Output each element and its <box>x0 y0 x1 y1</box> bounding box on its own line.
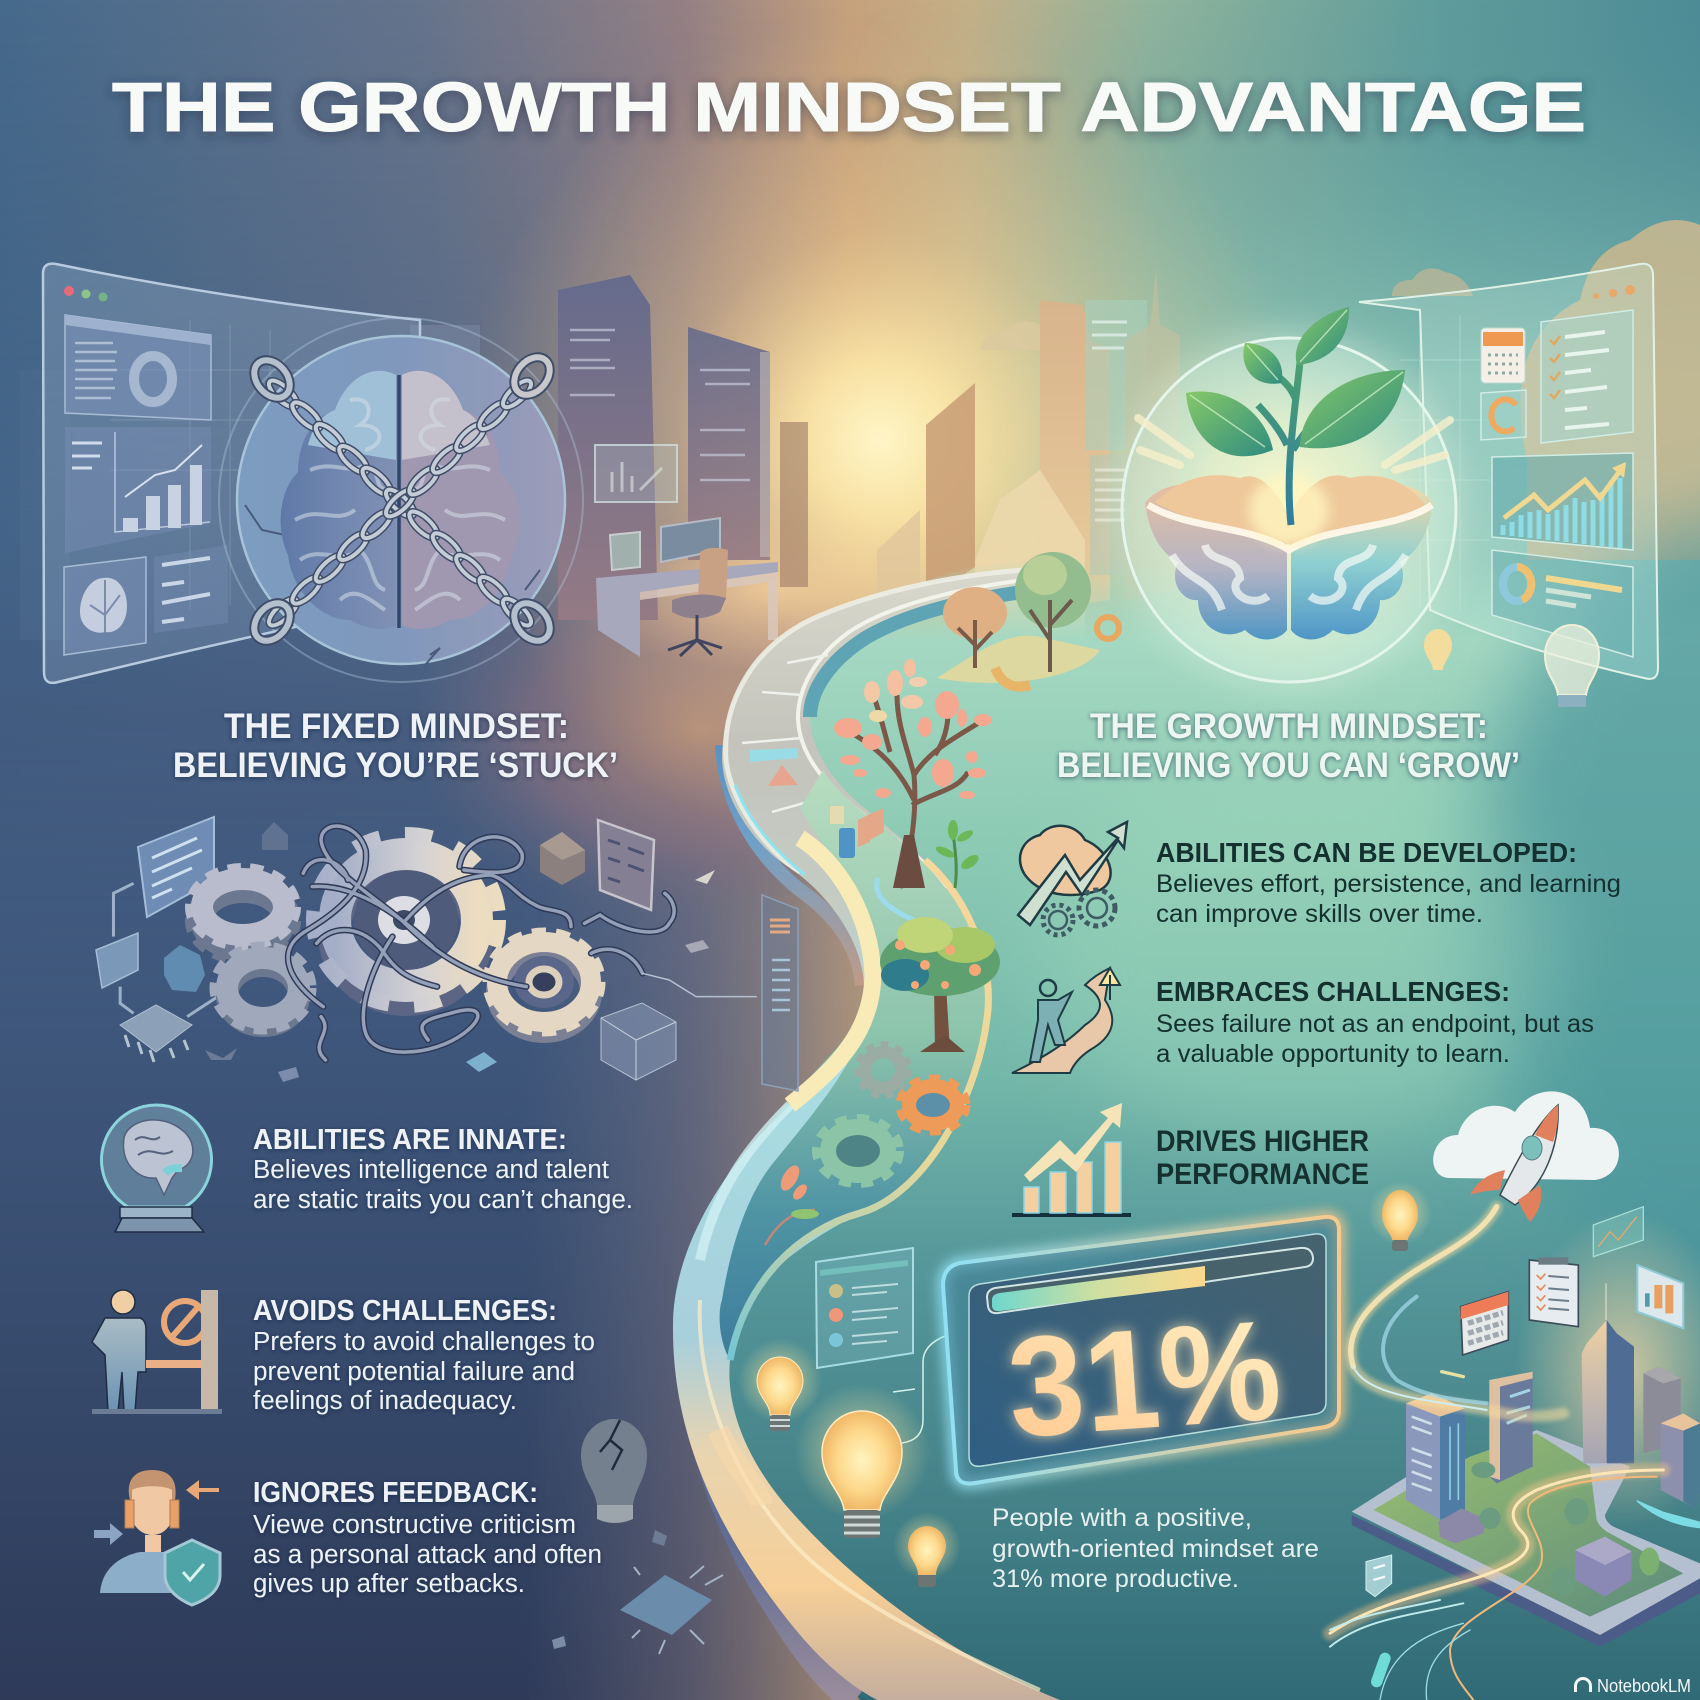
connector line <box>893 1336 945 1443</box>
tangled wires <box>288 826 756 1060</box>
left column text: abilities are innate: are static traits you can’t change. <box>253 1186 633 1214</box>
text card <box>154 545 228 633</box>
title: THE GROWTH MINDSET ADVANTAGE <box>112 68 1586 146</box>
left column text: abilities are innate <box>253 1124 633 1214</box>
panel: 31% stat <box>943 1217 1339 1483</box>
progress bar <box>987 1248 1313 1313</box>
left dashboard screen <box>43 264 420 683</box>
icon: blossom tree <box>834 659 992 888</box>
heading: fixed mindset: BELIEVING YOU’RE ‘STUCK’ <box>173 746 618 785</box>
line chart card <box>1492 453 1633 550</box>
sprout <box>1186 307 1405 525</box>
big number: 31% <box>1003 1290 1285 1468</box>
road surface rim and lines <box>726 570 1023 887</box>
small trees <box>1471 1462 1659 1596</box>
chart card <box>65 427 211 553</box>
icon: climber on winding path <box>1012 968 1120 1073</box>
icon: glowing bulbs <box>738 1339 961 1587</box>
sandy hill <box>937 636 1100 683</box>
heading: growth mindset <box>1057 707 1520 785</box>
small donut card <box>1481 390 1526 440</box>
right column text: abilities can be developed <box>1156 837 1621 928</box>
floating calendar <box>1461 1292 1508 1355</box>
glass road S-curve <box>673 570 1060 1700</box>
floating line chart card <box>1593 1207 1643 1257</box>
scattered debris <box>205 870 715 1082</box>
heading: growth mindset: BELIEVING YOU CAN ‘GROW’ <box>1057 746 1520 785</box>
icon: cloud and rocket <box>1433 1091 1619 1222</box>
brain card <box>64 557 146 655</box>
tree: green <box>1015 552 1091 672</box>
left column text: ignores feedback <box>253 1477 602 1598</box>
right skyline and clouds <box>877 220 1700 660</box>
chip <box>120 1005 192 1062</box>
productivity statement: People with a positive, <box>992 1504 1252 1532</box>
left column text: avoids challenges: AVOIDS CHALLENGES: <box>253 1295 557 1327</box>
right column text: abilities can be developed: Believes effort, persistence, and learning <box>1156 870 1621 898</box>
lower right isometric city <box>1352 1283 1700 1647</box>
left column text: ignores feedback: as a personal attack and often <box>253 1541 602 1569</box>
connector lines <box>113 883 223 1017</box>
icon: chip <box>552 1530 723 1654</box>
tree: tan <box>943 587 1007 668</box>
ground of the growth side <box>690 520 1700 1700</box>
illustration: broken gears and tangled wires <box>96 817 756 1082</box>
icon: person blocked by barrier <box>92 1290 222 1414</box>
heading: growth mindset: THE GROWTH MINDSET: <box>1090 707 1488 746</box>
floating server panel <box>762 895 798 1091</box>
cube <box>540 832 585 885</box>
small house glyph <box>262 822 288 850</box>
floating card right <box>598 820 654 910</box>
floating bar chart card <box>1637 1265 1683 1328</box>
brain <box>281 371 520 629</box>
list card <box>816 1248 913 1368</box>
right dashboard screen <box>1359 264 1658 679</box>
left column text: avoids challenges: feelings of inadequacy. <box>253 1387 517 1415</box>
heading: fixed mindset: THE FIXED MINDSET: <box>224 707 569 746</box>
icon: cracked lightbulb <box>581 1419 647 1523</box>
right gear <box>487 932 601 1032</box>
window with donut <box>65 315 211 420</box>
NotebookLM mark: NotebookLM <box>1597 1676 1691 1696</box>
right column text: embraces challenges: Sees failure not as an endpoint, but as <box>1156 1010 1594 1038</box>
left skyline and desk scene <box>20 275 808 657</box>
right column text: abilities can be developed: can improve skills over time. <box>1156 900 1483 928</box>
icon: fruit tree <box>880 917 1000 1052</box>
left small panel and boxes <box>96 933 205 992</box>
icon: chained brain in cracked globe <box>219 318 583 682</box>
platform <box>1352 1430 1700 1647</box>
icon: big bulb on screen <box>1545 625 1599 707</box>
left column text: avoids challenges <box>253 1295 595 1415</box>
left gears <box>191 869 311 1029</box>
floating clipboard <box>1529 1257 1578 1327</box>
icon: brain in crystal ball <box>101 1105 212 1232</box>
productivity statement: growth-oriented mindset are <box>992 1535 1319 1563</box>
box right <box>601 1003 676 1080</box>
brain bowl <box>1145 475 1433 639</box>
donut card <box>1492 550 1633 657</box>
right column text: drives higher performance <box>1156 1125 1369 1191</box>
left column text: avoids challenges: prevent potential failure and <box>253 1358 575 1386</box>
small bar chart on road <box>830 806 884 858</box>
icon: small bulb on screen <box>1424 629 1452 670</box>
right column text: abilities can be developed: ABILITIES CAN BE DEVELOPED: <box>1156 837 1577 868</box>
icon: small sprout <box>934 820 981 888</box>
center gear <box>314 835 498 1005</box>
rocket and city light streams <box>1330 1207 1663 1700</box>
heading: fixed mindset <box>173 707 618 785</box>
calendar card <box>1481 328 1525 383</box>
right column text: embraces challenges: EMBRACES CHALLENGES: <box>1156 976 1510 1007</box>
left column text: abilities are innate: ABILITIES ARE INNATE: <box>253 1124 567 1156</box>
light rays <box>1138 418 1450 470</box>
right column text: drives higher performance: DRIVES HIGHER <box>1156 1125 1369 1158</box>
chains <box>247 350 557 648</box>
left column text: abilities are innate: Believes intelligence and talent <box>253 1156 609 1184</box>
growth brain with sprout <box>1111 307 1467 695</box>
productivity statement: 31% more productive. <box>992 1565 1239 1593</box>
productivity statement <box>992 1504 1319 1593</box>
icon: rising bar chart <box>1012 1103 1131 1217</box>
checklist card <box>1541 310 1633 443</box>
right column text: embraces challenges: a valuable opportunity to learn. <box>1156 1040 1510 1068</box>
right column text: drives higher performance: PERFORMANCE <box>1156 1158 1369 1191</box>
floating note <box>1366 1555 1392 1597</box>
desk <box>596 518 778 657</box>
left column text: ignores feedback: Viewe constructive criticism <box>253 1511 576 1539</box>
icon: brain growth arrow and gears <box>1018 822 1127 935</box>
small flowers on road <box>765 1162 819 1245</box>
floating card <box>595 445 677 502</box>
floating card left <box>138 817 214 917</box>
left column text: ignores feedback: IGNORES FEEDBACK: <box>253 1477 538 1509</box>
icon: person with headphones and shield <box>94 1470 220 1605</box>
icon: road gears <box>816 1044 967 1184</box>
icon: small bulb <box>1368 1181 1432 1251</box>
small gears in park <box>995 617 1119 687</box>
road underside <box>690 745 862 1700</box>
left column text: avoids challenges: Prefers to avoid challenges to <box>253 1328 595 1356</box>
garden inside the road bend <box>700 770 1040 1690</box>
left column text: ignores feedback: gives up after setbacks. <box>253 1570 525 1598</box>
buildings <box>1406 1283 1700 1597</box>
right column text: embraces challenges <box>1156 976 1594 1068</box>
